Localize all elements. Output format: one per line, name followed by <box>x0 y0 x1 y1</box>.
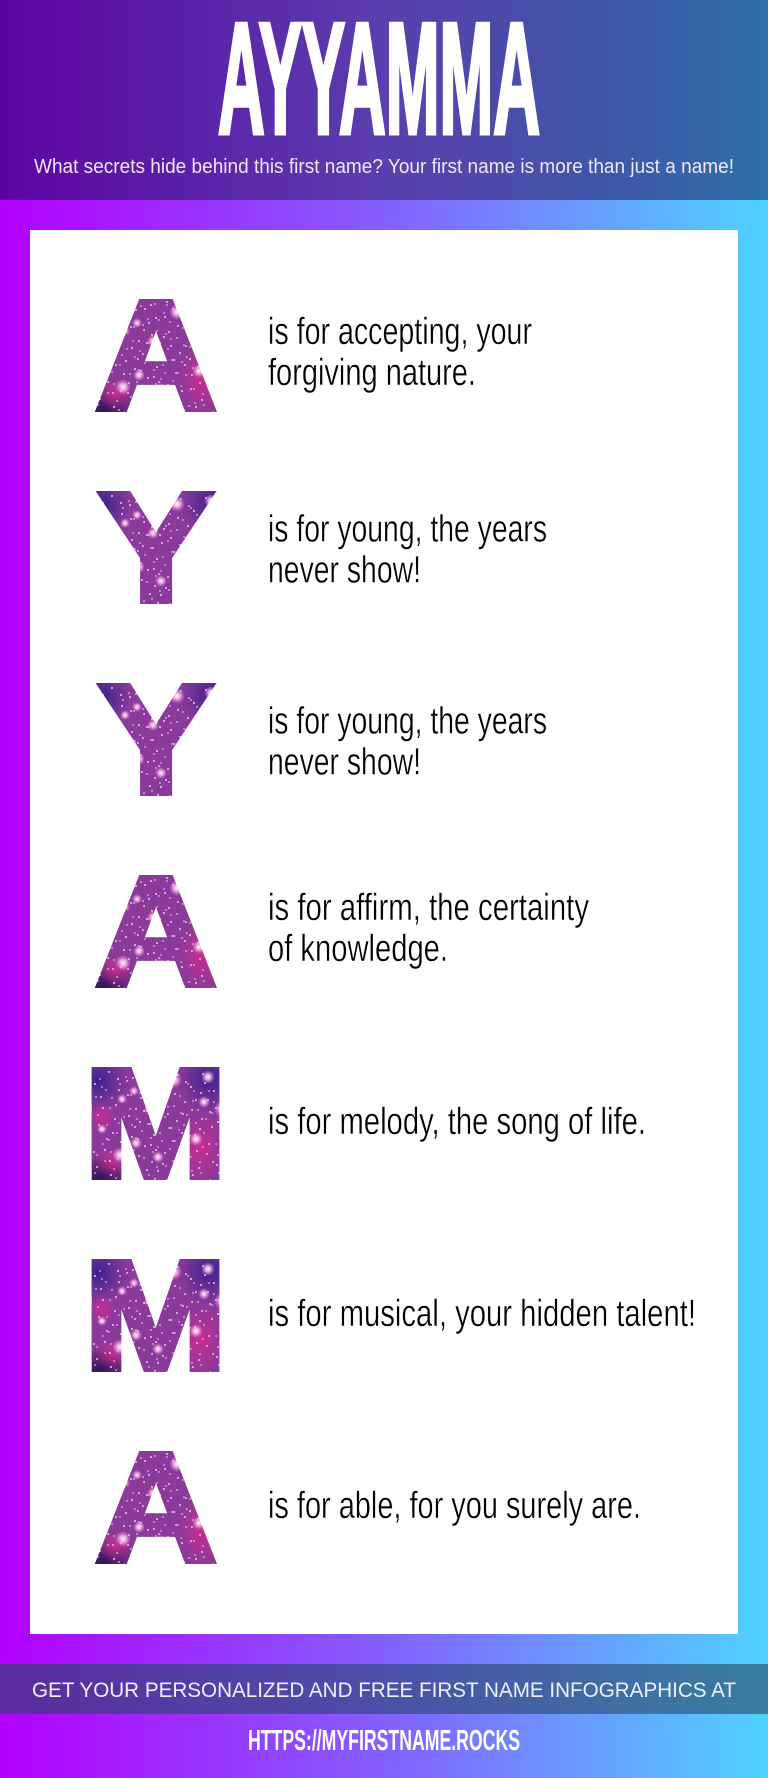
row text: accepting: forgiving nature. <box>268 352 476 394</box>
row text: able: is for able, for you surely are. <box>268 1485 641 1527</box>
row text: young again <box>268 701 547 784</box>
row text: affirm: of knowledge. <box>268 928 448 970</box>
letter A: accepting: A <box>96 270 216 442</box>
row text: melody: is for melody, the song of life. <box>268 1101 646 1143</box>
footer call to action: GET YOUR PERSONALIZED AND FREE FIRST NAME INFOGRAPHICS AT <box>32 1679 736 1702</box>
row text: young <box>268 509 547 592</box>
row text: young: is for young, the years <box>268 509 547 551</box>
letter A: able: A <box>96 1422 216 1594</box>
letter M: musical: M <box>84 1230 227 1402</box>
letter A: affirm: A <box>96 846 216 1018</box>
subtitle: What secrets hide behind this first name? Your first name is more than just a name! <box>34 156 734 178</box>
row text: accepting <box>268 311 532 394</box>
row text: affirm <box>268 887 589 970</box>
letter M: melody: M <box>84 1038 227 1210</box>
footer URL: HTTPS://MYFIRSTNAME.ROCKS <box>248 1725 520 1757</box>
row text: affirm: is for affirm, the certainty <box>268 887 589 929</box>
header band <box>0 0 768 200</box>
white content panel <box>30 230 738 1634</box>
row text: young: never show! <box>268 550 421 592</box>
footer band <box>0 1664 768 1714</box>
row text: young again: never show! <box>268 742 421 784</box>
row text: young again: is for young, the years <box>268 701 547 743</box>
row text: accepting: is for accepting, your <box>268 311 532 353</box>
letter Y: young: Y <box>100 462 212 634</box>
letter Y: young again: Y <box>100 654 212 826</box>
